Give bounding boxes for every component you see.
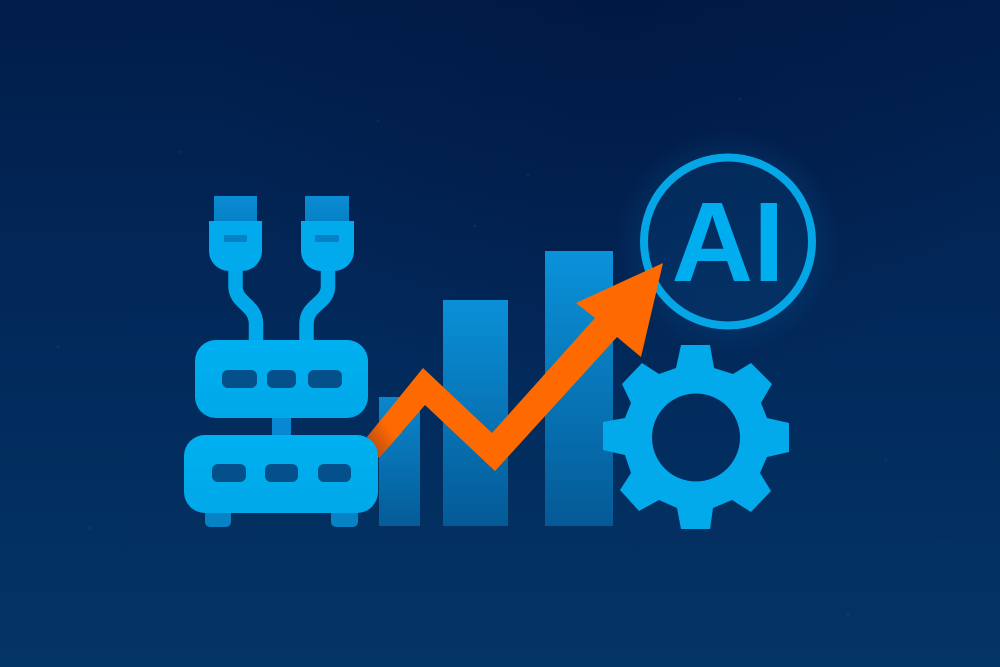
cable: right	[306, 268, 328, 345]
foot: right	[331, 510, 358, 527]
AI label: AI	[672, 179, 784, 305]
arrow shadow near router	[367, 415, 402, 458]
plug: left	[209, 196, 262, 271]
cable: left	[236, 268, 256, 345]
bar chart	[379, 251, 613, 526]
router unit: upper	[195, 340, 368, 418]
icon: AI badge	[644, 158, 812, 326]
icon: network router stack	[184, 196, 378, 527]
router unit: lower	[184, 435, 378, 513]
plug: right	[301, 196, 354, 271]
bar 2	[443, 300, 508, 526]
bar 1	[379, 397, 420, 526]
badge ring	[644, 158, 812, 326]
bar 3	[545, 251, 613, 526]
foot: left	[205, 510, 231, 527]
icon: gear	[603, 345, 789, 529]
connector between units	[272, 416, 291, 437]
arrow: rising trend	[367, 263, 663, 471]
